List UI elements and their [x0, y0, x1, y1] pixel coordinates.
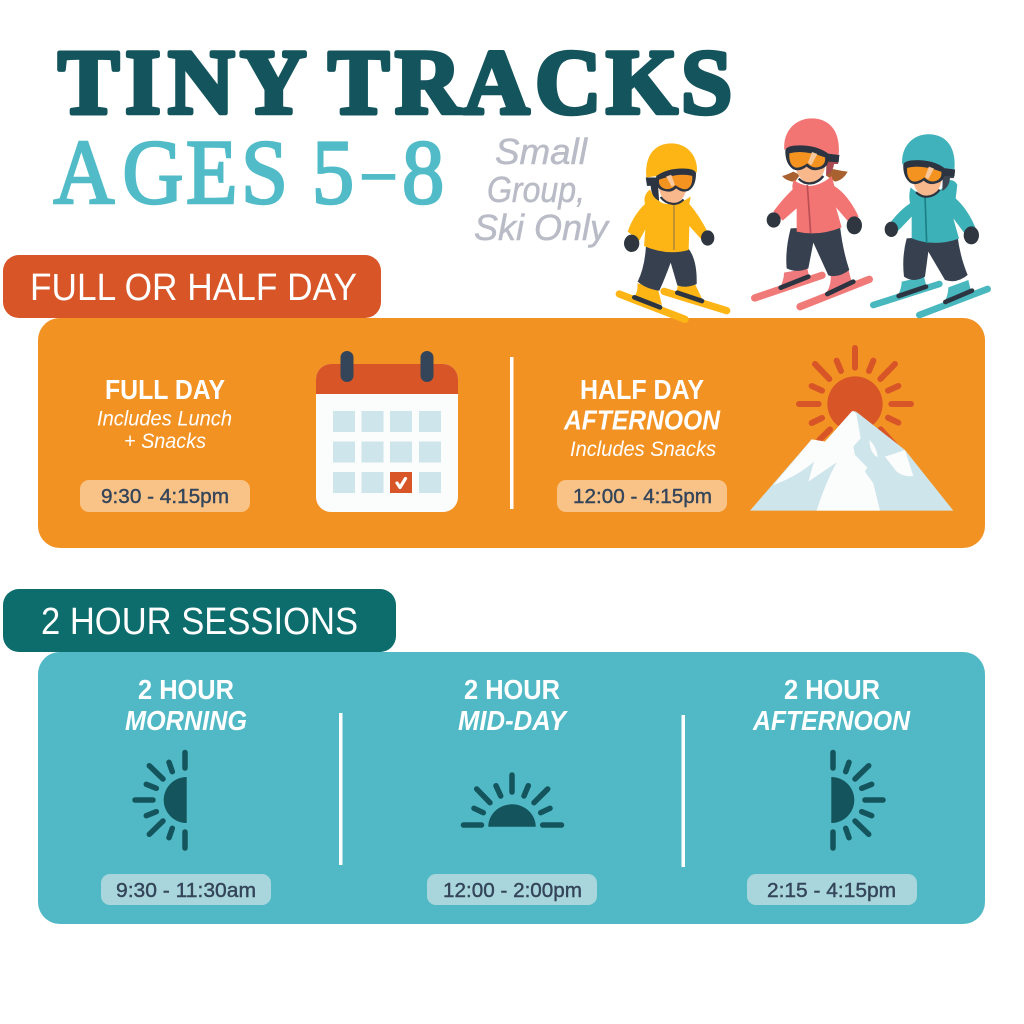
text: 2 hour morning: MORNING: [125, 705, 247, 736]
teal panel background: [38, 652, 985, 924]
illustration: teal child skier: [873, 134, 988, 315]
subtitle: Ages 5-8: AGES 5: [53, 122, 354, 224]
text: half day afternoon: AFTERNOON: [563, 404, 721, 436]
time pill: afternoon: [747, 874, 917, 905]
text: half day afternoon: [563, 374, 721, 461]
subtitle: Ages 5-8: 8: [402, 122, 444, 224]
head: yellow helmet and goggles: [646, 143, 697, 204]
head: teal helmet and goggles: [902, 134, 955, 197]
text: 2 hour morning: 2 HOUR: [138, 674, 234, 705]
icon: calendar: [316, 351, 458, 512]
illustration: yellow child skier: [619, 143, 727, 319]
heading tab: full or half day: FULL OR HALF DAY: [30, 267, 357, 309]
time pill: mid-day: 12:00 - 2:00pm: [443, 880, 582, 902]
text: full day: FULL DAY: [105, 374, 225, 405]
text: 2 hour mid-day: [458, 674, 568, 736]
time pill: full day: [80, 480, 250, 512]
heading tab: 2 hour sessions: 2 HOUR SESSIONS: [41, 601, 358, 643]
text: half day afternoon: HALF DAY: [580, 374, 704, 405]
text: full day: [97, 374, 232, 453]
text: 2 hour morning: [125, 674, 247, 736]
panel: full or half day: [3, 255, 985, 548]
subtitle: Ages 5-8: –: [362, 133, 395, 207]
illustration: pink child skier: [755, 118, 869, 307]
head: pink helmet and goggles: [784, 118, 839, 183]
orange panel background: [38, 318, 985, 548]
time pill: half day: [557, 480, 727, 512]
heading tab: full or half day: [3, 255, 381, 318]
icon: mid-day sun: [464, 775, 562, 827]
text: 2 hour afternoon: [752, 674, 911, 736]
note: small group, ski only: Ski Only: [474, 207, 610, 248]
text: half day afternoon: Includes Snacks: [570, 437, 716, 461]
time pill: full day: 9:30 - 4:15pm: [101, 486, 229, 508]
time pill: morning: 9:30 - 11:30am: [116, 880, 256, 902]
panel: 2 hour sessions: [3, 589, 985, 924]
text: full day: Includes Lunch: [97, 406, 232, 430]
title: Tiny Tracks: TINY TRACKS: [58, 31, 732, 133]
note: small group, ski only: Group,: [487, 169, 585, 210]
text: 2 hour mid-day: MID-DAY: [458, 705, 568, 736]
icon: sun behind mountain: [750, 348, 953, 511]
time pill: afternoon: 2:15 - 4:15pm: [767, 880, 896, 902]
note: small group, ski only: [474, 131, 610, 248]
heading tab: 2 hour sessions: [3, 589, 396, 652]
time pill: mid-day: [427, 874, 597, 905]
text: 2 hour mid-day: 2 HOUR: [464, 674, 560, 705]
icon: morning sun: [135, 752, 187, 848]
time pill: half day: 12:00 - 4:15pm: [573, 486, 712, 508]
note: small group, ski only: Small: [495, 131, 588, 172]
text: 2 hour afternoon: 2 HOUR: [784, 674, 880, 705]
text: 2 hour afternoon: AFTERNOON: [752, 705, 911, 736]
text: full day: + Snacks: [124, 429, 206, 453]
time pill: morning: [101, 874, 271, 905]
icon: afternoon sun: [831, 752, 883, 848]
